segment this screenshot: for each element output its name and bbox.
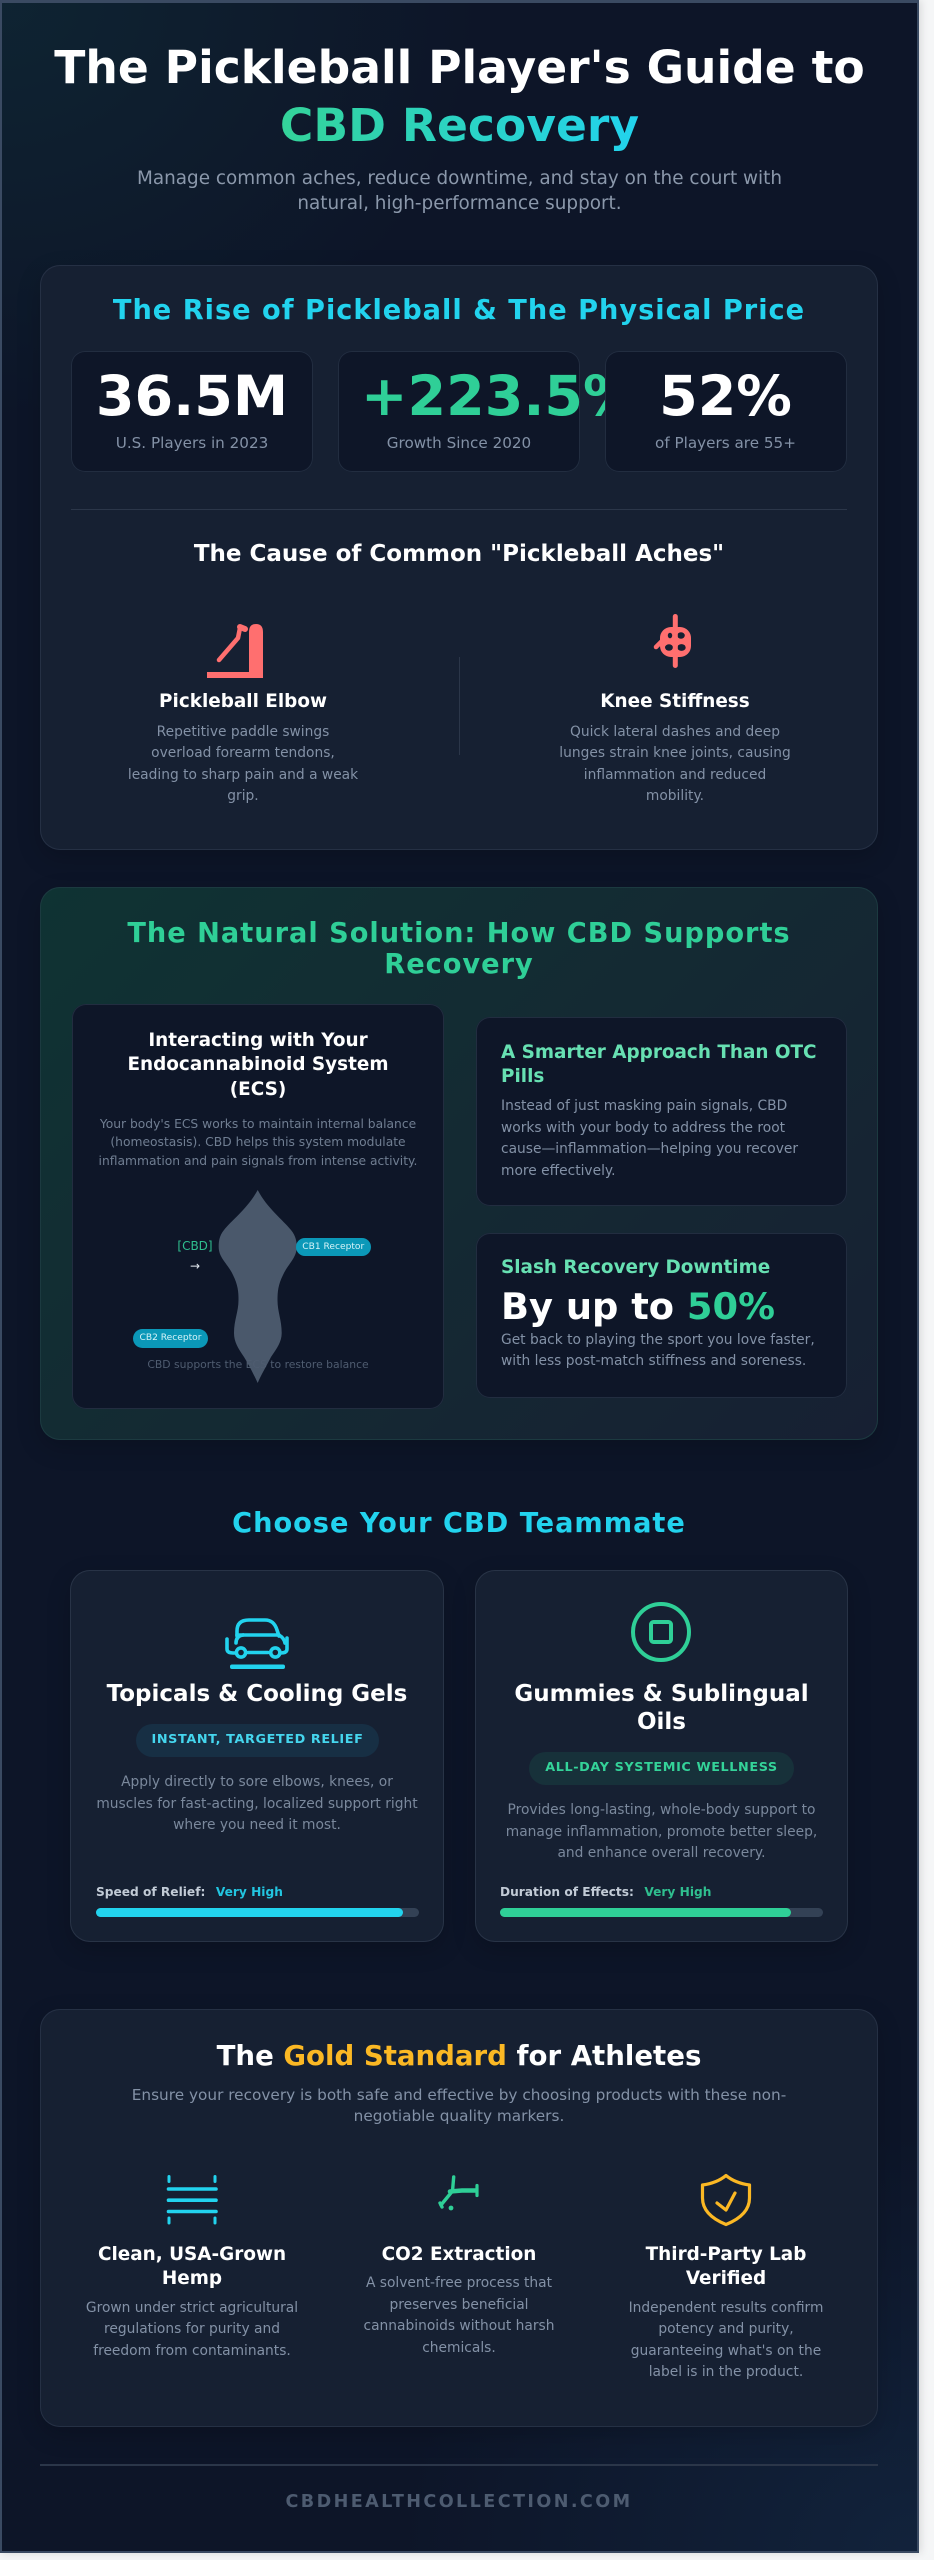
card title: downtime: Slash Recovery Downtime xyxy=(501,1257,770,1278)
card text: smarter approach: more effectively. xyxy=(501,1163,616,1179)
stat card: players xyxy=(71,351,313,472)
heading: rise of pickleball: The Rise of Pickleball & The Physical Price xyxy=(113,295,805,326)
stat label: age: of Players are 55+ xyxy=(655,434,796,452)
marker: CO2 extraction xyxy=(364,2175,554,2356)
marker: clean hemp xyxy=(86,2175,298,2359)
diagram caption: CBD supports the ECS to restore balance xyxy=(147,1358,369,1371)
card text: ECS: Your body's ECS works to maintain internal balance xyxy=(100,1117,416,1131)
text: knee stiffness: Quick lateral dashes and deep xyxy=(570,724,780,740)
title: clean hemp: Hemp xyxy=(162,2268,222,2289)
text: knee stiffness: lunges strain knee joints, causing xyxy=(559,745,791,761)
text: pickleball elbow xyxy=(128,724,358,804)
pill: instant relief: INSTANT, TARGETED RELIEF xyxy=(152,1732,363,1747)
text: knee stiffness xyxy=(559,724,791,804)
text: gummies: and enhance overall recovery. xyxy=(557,1845,766,1861)
text: lab verified: Independent results confirm xyxy=(629,2300,823,2316)
text: pickleball elbow: Repetitive paddle swings xyxy=(157,724,329,740)
footer xyxy=(40,2464,878,2526)
title: lab verified xyxy=(646,2244,806,2289)
subtitle: Manage common aches, reduce downtime, and stay on the court with xyxy=(137,168,782,189)
icon: knee xyxy=(654,614,691,668)
text: gummies: Provides long-lasting, whole-body support to xyxy=(508,1802,815,1818)
intro text: gold standard: Ensure your recovery is both safe and effective by choosing products with these non- xyxy=(132,2086,786,2104)
progress fill: 95 percent xyxy=(96,1908,403,1917)
icon: hemp rows xyxy=(166,2175,218,2224)
text: topicals: Apply directly to sore elbows, knees, or xyxy=(121,1774,393,1790)
text: CO2 extraction: preserves beneficial xyxy=(389,2297,529,2313)
card text: smarter approach: Instead of just masking pain signals, CBD xyxy=(501,1098,787,1114)
footer brand: CBDHEALTHCOLLECTION.COM xyxy=(285,2492,633,2512)
card text: downtime: Get back to playing the sport you love faster, xyxy=(501,1332,815,1348)
metric label: speed of relief: Speed of Relief: Very High xyxy=(96,1885,283,1899)
text: clean hemp: regulations for purity and xyxy=(104,2321,280,2337)
progress bar: speed of relief xyxy=(96,1908,419,1917)
metric label: duration of effects: Duration of Effects: Very High xyxy=(500,1885,711,1899)
card title: smarter approach: A Smarter Approach Than OTC xyxy=(501,1042,817,1063)
text: lab verified: label is in the product. xyxy=(649,2364,803,2380)
pill: all-day wellness xyxy=(529,1752,794,1785)
intro text: gold standard xyxy=(132,2086,786,2125)
text: clean hemp: Grown under strict agricultural xyxy=(86,2300,298,2316)
text: pickleball elbow: overload forearm tendons, xyxy=(151,745,335,761)
icon: topical car xyxy=(225,1618,289,1669)
text: lab verified: potency and purity, xyxy=(658,2321,794,2337)
card: smarter approach xyxy=(476,1017,847,1206)
pill: instant relief xyxy=(136,1724,379,1757)
card title: ECS xyxy=(127,1030,389,1100)
title: lab verified: Third-Party Lab xyxy=(646,2244,806,2265)
text: CO2 extraction: chemicals. xyxy=(422,2340,496,2356)
heading: gold standard: The Gold Standard for Athletes xyxy=(217,2039,701,2072)
text: gummies: manage inflammation, promote better sleep, xyxy=(506,1824,817,1840)
card text: smarter approach xyxy=(501,1098,798,1179)
text: knee stiffness: mobility. xyxy=(646,788,704,804)
title: clean hemp xyxy=(98,2244,286,2289)
title: gummies: Oils xyxy=(637,1709,686,1735)
title: pickleball elbow: Pickleball Elbow xyxy=(159,691,327,712)
intro text: gold standard: negotiable quality markers. xyxy=(354,2107,564,2125)
title: gummies: Gummies & Sublingual xyxy=(514,1681,809,1707)
card text: smarter approach: cause—inflammation—helping you recover xyxy=(501,1141,798,1157)
panel: gold standard xyxy=(40,2009,878,2427)
subtitle xyxy=(137,168,782,214)
card text: ECS: inflammation and pain signals from intense activity. xyxy=(99,1154,417,1168)
heading: choose your teammate: Choose Your CBD Teammate xyxy=(232,1508,686,1539)
stat number: growth: +223.5% xyxy=(361,364,639,429)
text: CO2 extraction: A solvent-free process that xyxy=(366,2275,552,2291)
text: CO2 extraction xyxy=(364,2275,554,2356)
icon: elbow xyxy=(207,624,263,678)
marker: lab verified xyxy=(629,2174,823,2380)
pill: CB1 receptor xyxy=(296,1238,370,1256)
title xyxy=(54,41,865,152)
title: clean hemp: Clean, USA-Grown xyxy=(98,2244,286,2265)
text: gummies xyxy=(506,1802,817,1861)
panel: rise of pickleball xyxy=(40,265,878,850)
title: topicals: Topicals & Cooling Gels xyxy=(107,1681,407,1707)
heading: natural solution xyxy=(127,918,791,980)
stat card: age xyxy=(604,351,847,472)
text: lab verified: guaranteeing what's on the xyxy=(631,2343,821,2359)
ache: knee stiffness xyxy=(559,614,791,804)
title: knee stiffness: Knee Stiffness xyxy=(600,691,750,712)
title: gummies xyxy=(514,1681,809,1735)
heading: causes: The Cause of Common "Pickleball Aches" xyxy=(194,541,724,567)
pill: all-day wellness: ALL-DAY SYSTEMIC WELLNESS xyxy=(545,1760,778,1775)
body silhouette xyxy=(218,1190,296,1383)
card text: ECS xyxy=(99,1117,417,1168)
card text: ECS: (homeostasis). CBD helps this system modulate xyxy=(110,1135,406,1149)
text: topicals: muscles for fast-acting, localized support right xyxy=(96,1796,418,1812)
card title: ECS: (ECS) xyxy=(230,1079,286,1100)
title: CO2 extraction: CO2 Extraction xyxy=(382,2244,536,2265)
text: topicals xyxy=(96,1774,418,1833)
card text: downtime: with less post-match stiffness and soreness. xyxy=(501,1353,806,1369)
panel: natural solution xyxy=(40,887,878,1440)
card title: ECS: Interacting with Your xyxy=(148,1030,368,1051)
stat label: growth: Growth Since 2020 xyxy=(387,434,531,452)
card title: smarter approach: Pills xyxy=(501,1066,544,1087)
text: lab verified xyxy=(629,2300,823,2380)
icon: gummy xyxy=(631,1602,691,1662)
card text: smarter approach: works with your body to address the root xyxy=(501,1120,785,1136)
stat number: 36.5M: 36.5M xyxy=(96,364,288,429)
pill: CB1 receptor: CB1 Receptor xyxy=(302,1242,364,1252)
card: slash recovery downtime xyxy=(476,1233,847,1398)
text: clean hemp: freedom from contaminants. xyxy=(93,2343,291,2359)
big stat: 50%: By up to 50% xyxy=(501,1285,775,1328)
title: The Pickleball Player's Guide to xyxy=(54,41,865,94)
title: lab verified: Verified xyxy=(686,2268,766,2289)
card title: smarter approach xyxy=(501,1042,817,1087)
card text: downtime xyxy=(501,1332,815,1369)
arrow: CBD to receptors: → xyxy=(190,1259,200,1273)
progress fill: 90 percent xyxy=(500,1908,791,1917)
card title: ECS: Endocannabinoid System xyxy=(127,1054,389,1075)
stat label: players: U.S. Players in 2023 xyxy=(116,434,268,452)
pill: CB2 receptor xyxy=(133,1329,208,1348)
product card: gummies xyxy=(475,1570,848,1942)
label: CBD: [CBD] xyxy=(177,1239,213,1253)
text: pickleball elbow: leading to sharp pain and a weak xyxy=(128,767,358,783)
progress bar: duration of effects xyxy=(500,1908,823,1917)
icon: verified shield xyxy=(700,2174,752,2226)
text: CO2 extraction: cannabinoids without harsh xyxy=(364,2318,554,2334)
text: pickleball elbow: grip. xyxy=(227,788,259,804)
heading: natural solution: The Natural Solution: How CBD Supports xyxy=(127,918,791,948)
card: endocannabinoid system xyxy=(72,1004,444,1409)
icon: extraction plant xyxy=(438,2175,479,2210)
text: topicals: where you need it most. xyxy=(173,1817,341,1833)
pill: CB2 receptor: CB2 Receptor xyxy=(139,1333,202,1343)
ECS diagram xyxy=(133,1190,371,1383)
title: CBD Recovery xyxy=(280,99,639,152)
stat card: growth xyxy=(338,351,580,472)
text: clean hemp xyxy=(86,2300,298,2359)
subtitle: natural, high-performance support. xyxy=(297,192,622,214)
stat number: 52%: 52% xyxy=(659,364,792,429)
heading: natural solution: Recovery xyxy=(384,948,534,980)
text: knee stiffness: inflammation and reduced xyxy=(584,767,766,783)
ache: pickleball elbow xyxy=(128,624,358,804)
product card: topicals xyxy=(70,1570,444,1942)
